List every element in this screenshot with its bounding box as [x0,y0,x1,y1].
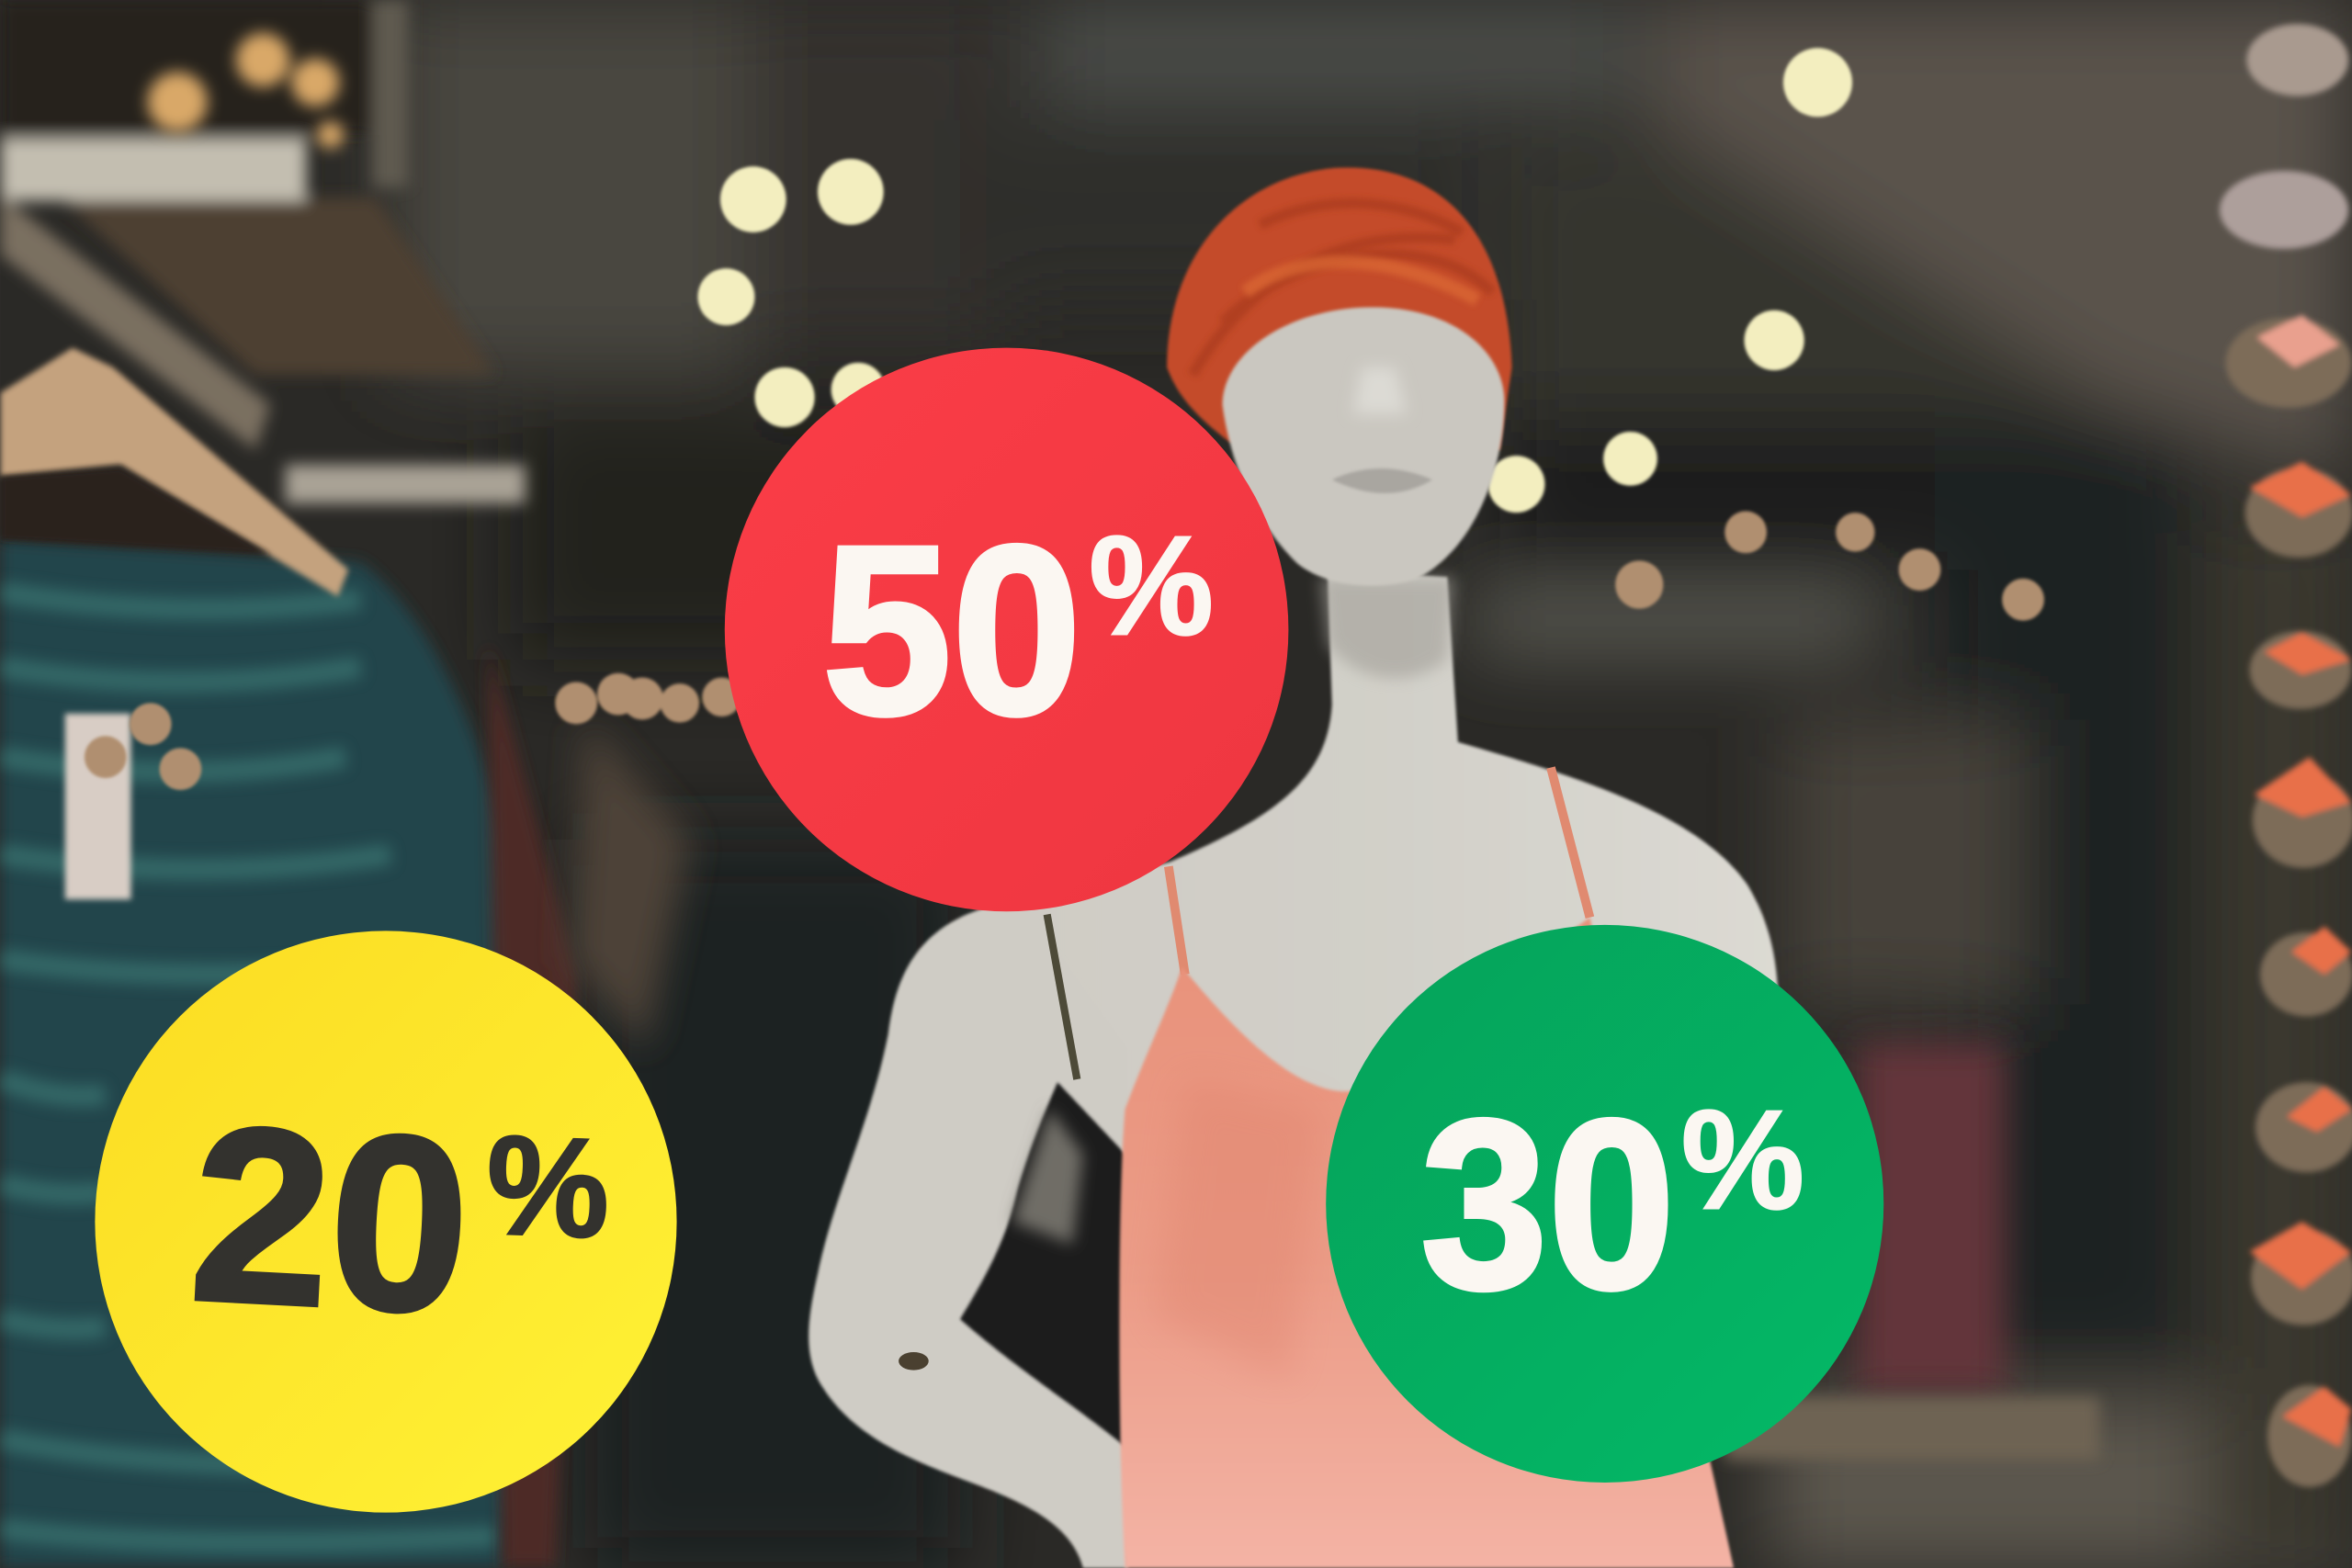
sticker: 50% red: % [1089,506,1214,664]
mannequin face [1223,308,1504,585]
sticker: 30% green: % [1681,1080,1804,1238]
sticker: 20% yellow: 20 [186,1075,476,1366]
mannequin torso [1020,570,1779,1349]
sticker: 50% red: 50 [822,495,1081,765]
sticker: 20% yellow [95,931,677,1513]
salmon dress [1119,918,1734,1568]
straps [1169,768,1589,975]
hanging baskets, right edge [2220,24,2352,1487]
sticker: 50% red [725,348,1288,911]
sticker: 30% green [1326,925,1883,1483]
mannequin [808,167,1779,1568]
warm lights, top left [147,33,344,149]
price tag [65,714,131,899]
wooden hanger [1,348,348,597]
bokeh lights [85,48,2044,790]
mannequin arm [808,899,1128,1568]
mark on arm [899,1352,929,1371]
floor ledge [1724,1397,2099,1461]
headscarf [1167,167,1512,450]
clothes rail: teal garment [1,539,690,1568]
shelf and wood beams, top left [1,0,526,503]
dark gap between arm and dress [960,1082,1133,1447]
sticker: 30% green: 30 [1420,1069,1675,1339]
sticker: 20% yellow: % [484,1105,612,1268]
neck shadow [1320,577,1455,678]
handbag highlight [1012,1110,1083,1245]
red panel, lower right [1857,1042,2007,1394]
